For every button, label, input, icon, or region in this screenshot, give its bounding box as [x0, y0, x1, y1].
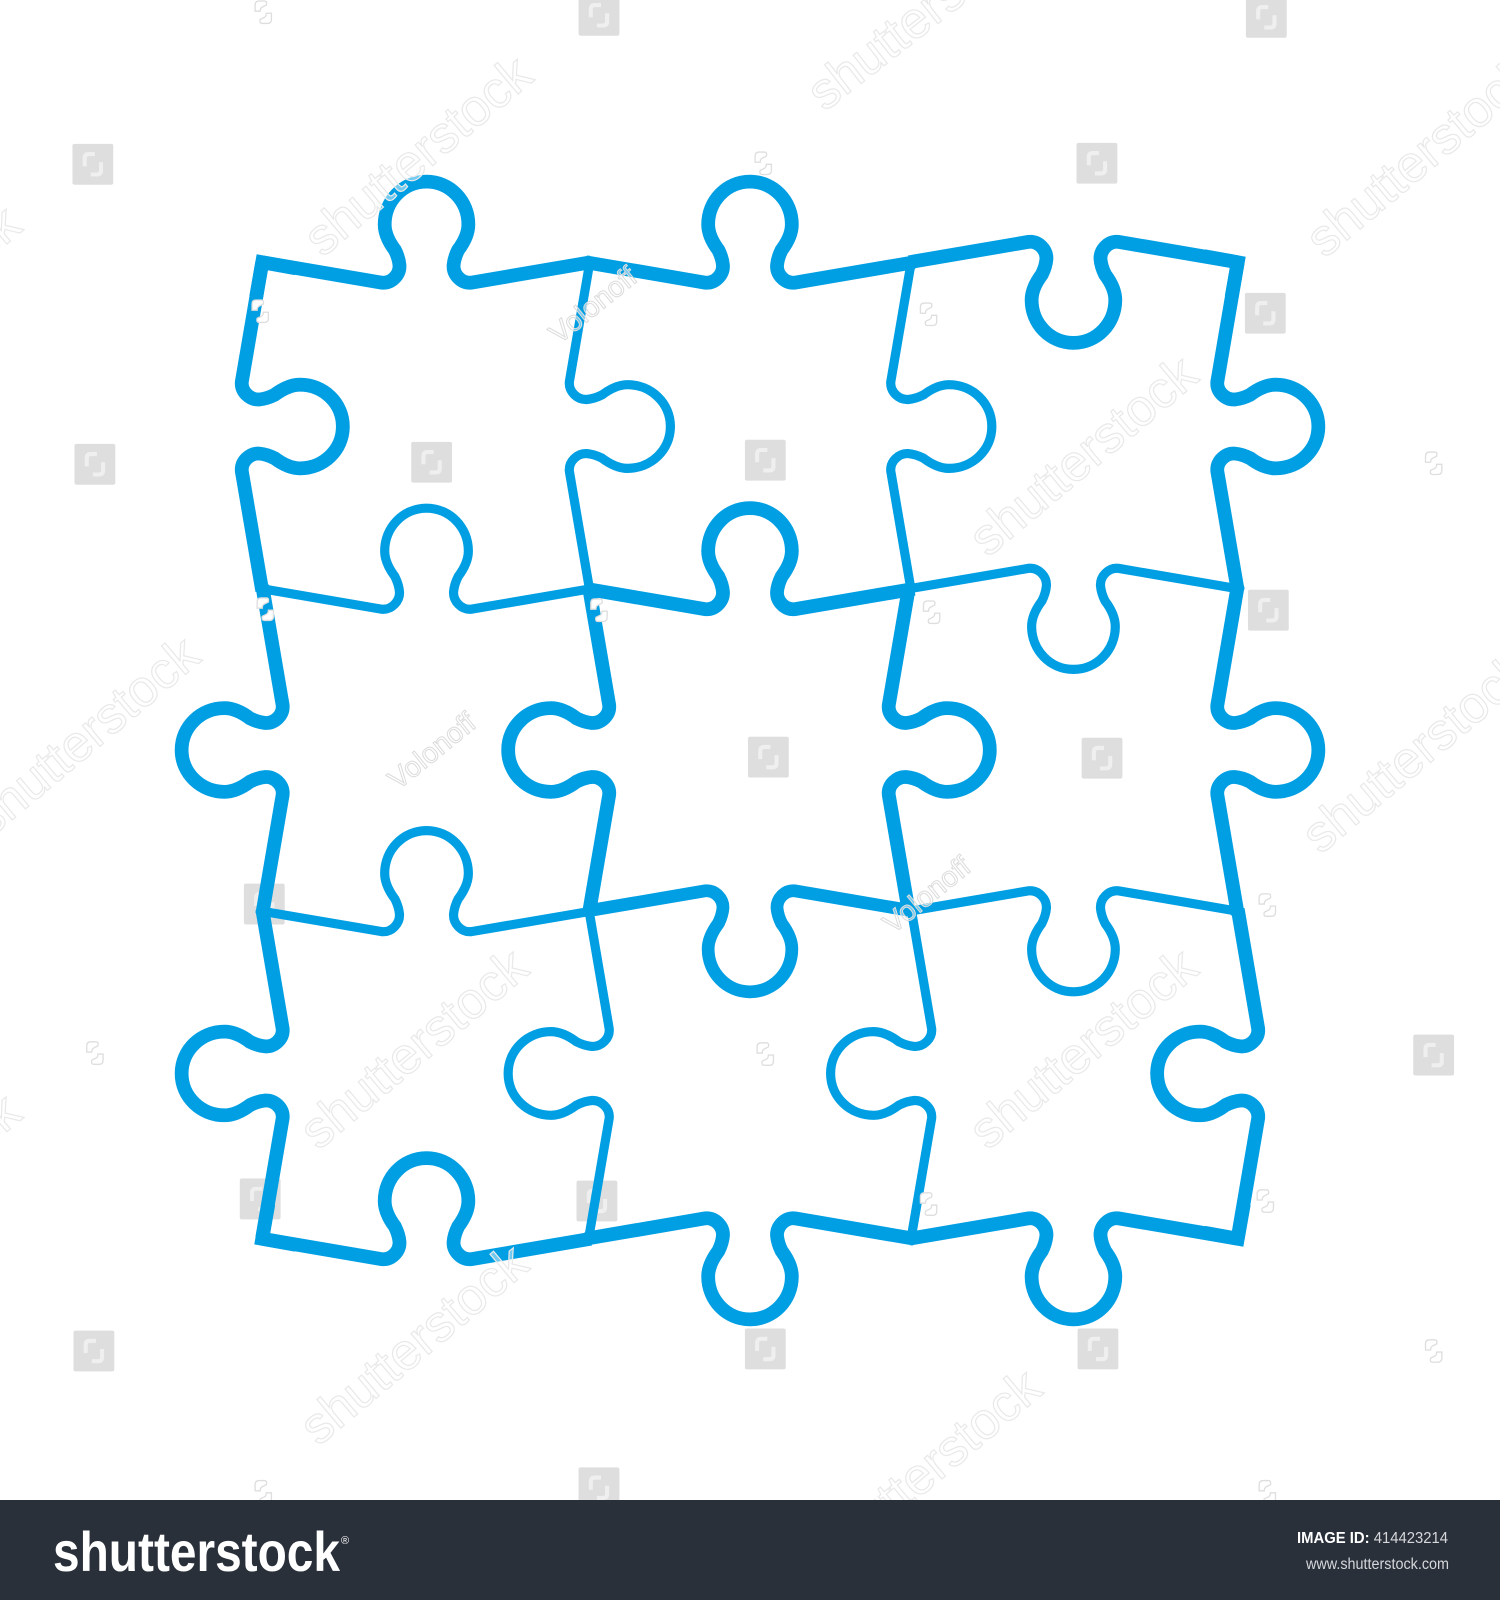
website url: www.shutterstock.com [1305, 1556, 1449, 1573]
watermark: shutterstock diagonal text: shutterstock [958, 343, 1208, 567]
image id: IMAGE ID: 414423214 [1297, 1530, 1448, 1547]
watermark: Volonoff diagonal text [382, 261, 977, 940]
footer logo: shutterstock: shutterstock [53, 1520, 341, 1583]
watermark: shutterstock diagonal text: shutterstock [958, 936, 1208, 1159]
watermark: Volonoff diagonal text: Volonoff [382, 707, 482, 796]
watermark: Volonoff diagonal text: Volonoff [877, 851, 977, 940]
watermark: shutterstock diagonal text: shutterstock [292, 43, 542, 267]
third row seams [262, 831, 1238, 992]
footer logo registered mark: ® [341, 1535, 349, 1547]
watermark: shutterstock diagonal text: shutterstock [288, 936, 538, 1159]
outer corners [256, 256, 1244, 1245]
watermark: shutterstock diagonal text: shutterstock [801, 1357, 1052, 1580]
left column seams [182, 262, 343, 1238]
top row seams [262, 182, 1238, 343]
right column seams [1157, 262, 1318, 1238]
puzzle grid [182, 182, 1318, 1319]
watermark: shutterstock diagonal text: shutterstock [288, 1232, 538, 1455]
second row seams [262, 508, 1238, 669]
third column seams [831, 262, 992, 1238]
watermark: Volonoff diagonal text: Volonoff [543, 261, 643, 350]
footer bar [0, 1500, 1500, 1600]
second column seams [508, 262, 670, 1238]
bottom row seams [262, 1158, 1238, 1319]
